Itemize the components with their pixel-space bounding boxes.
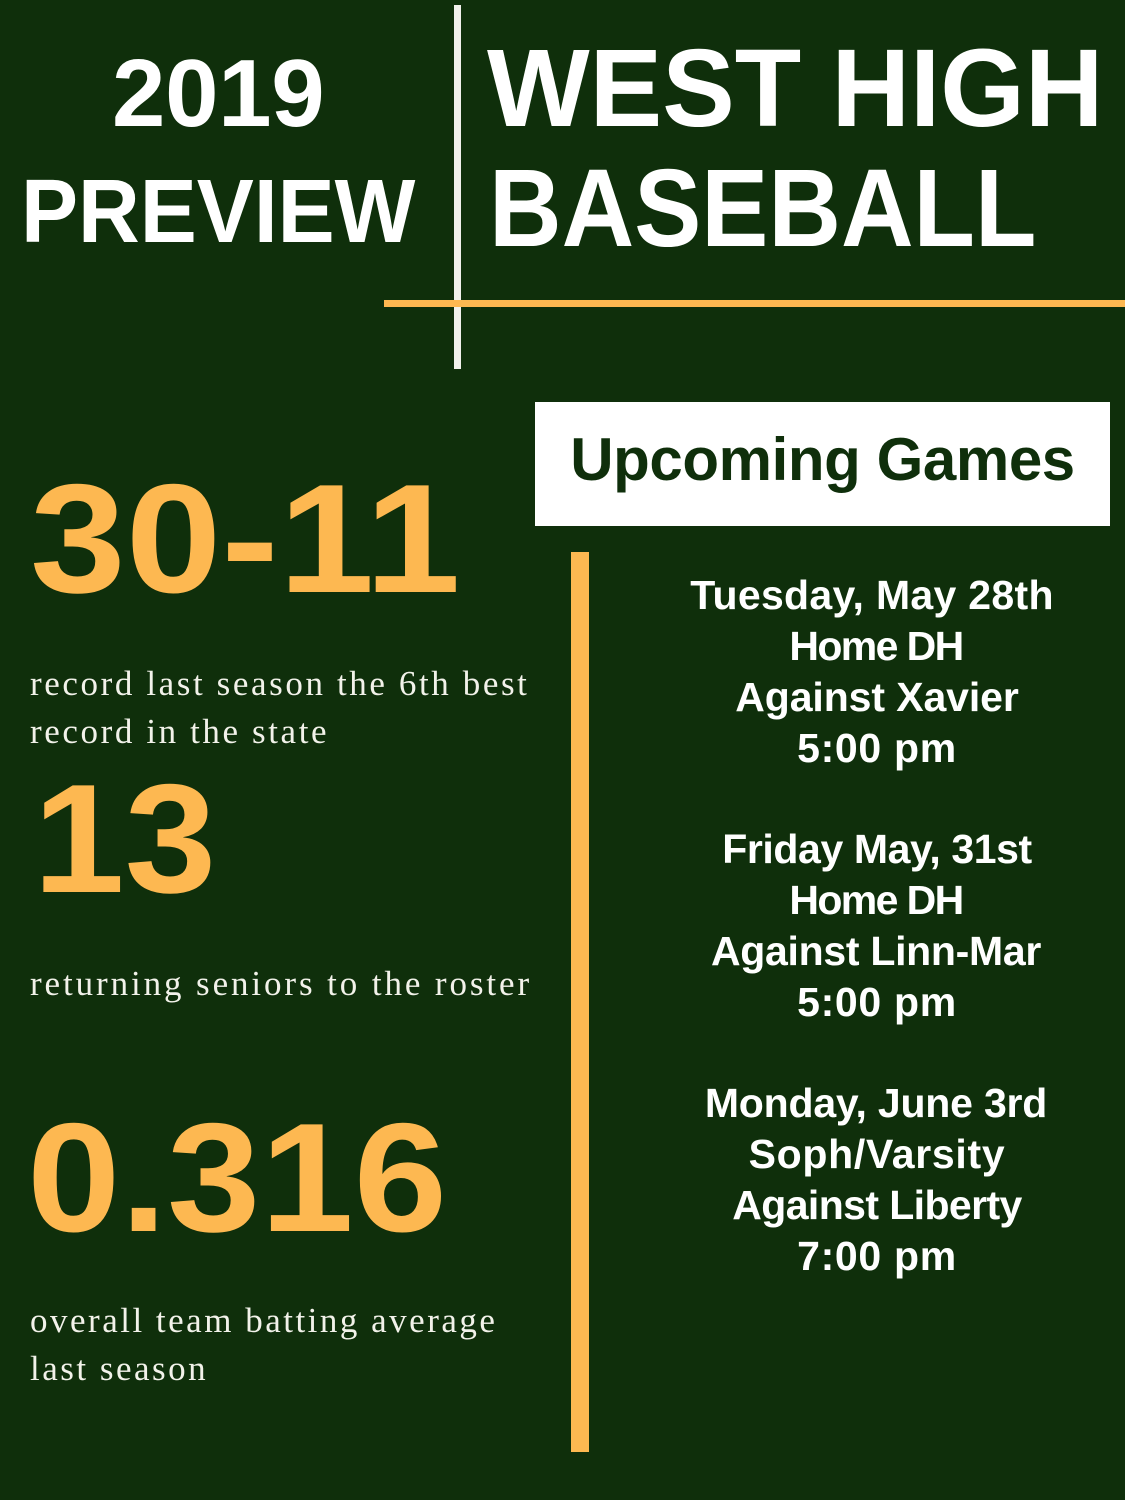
game: Linn-Mar: 5:00 pm [797,979,957,1025]
stat description: batting average: last season [30,1349,208,1388]
stat description: batting average [30,1301,497,1388]
game: Liberty: 7:00 pm [797,1233,957,1279]
panel: upcoming games heading [535,402,1110,526]
title line: 2019: 2019 [112,40,324,147]
game: Linn-Mar: Home DH [789,877,963,923]
title: 2019 preview [21,40,416,262]
game: Xavier: 5:00 pm [797,725,957,771]
game: Xavier: Home DH [789,623,963,669]
title line: Baseball: BASEBALL [489,147,1036,270]
stat number: 13: 13 [33,752,216,925]
stat description: batting average: overall team batting average [30,1301,497,1340]
stat: batting average [27,1091,497,1388]
game: Linn-Mar: Against Linn-Mar [711,928,1041,974]
stat description: record: record in the state [30,712,329,751]
horizontal gold rule [384,300,1125,307]
stat: season record [30,452,530,751]
stat description: record [30,664,530,751]
game: Liberty [705,1080,1047,1279]
game: Linn-Mar [711,826,1041,1025]
stat description: seniors: returning seniors to the roster [30,964,532,1003]
title line: preview: PREVIEW [21,162,415,262]
game: Liberty: Soph/Varsity [749,1131,1005,1177]
panel: upcoming games heading: Upcoming Games [570,426,1075,493]
title: West High Baseball [487,27,1103,270]
stat: returning seniors [30,752,532,1003]
game: Xavier: Tuesday, May 28th [690,572,1054,618]
vertical white rule [454,5,461,369]
game: Xavier: Against Xavier [735,674,1019,720]
vertical gold divider [571,552,589,1452]
game: Linn-Mar: Friday May, 31st [722,826,1032,872]
game: Liberty: Monday, June 3rd [705,1080,1047,1126]
game: Liberty: Against Liberty [732,1182,1022,1228]
game: Xavier [690,572,1054,771]
title line: West High: WEST HIGH [487,27,1103,150]
stat number: 0.316: 0.316 [27,1091,447,1264]
stat number: 30-11: 30-11 [30,452,461,625]
stat description: record: record last season the 6th best [30,664,530,703]
